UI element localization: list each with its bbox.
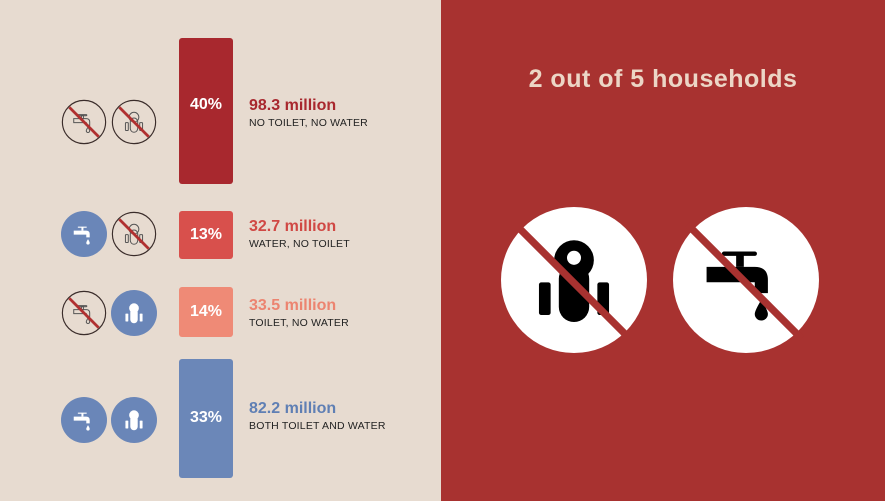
row3 icons [62, 290, 157, 336]
bar 40% [179, 38, 233, 184]
bar 14%: 14% [190, 303, 222, 320]
text 32.7 [249, 218, 350, 250]
bar 40%: 40% [190, 96, 222, 113]
text 33.5 [249, 297, 349, 329]
text 98.3: NO TOILET, NO WATER [249, 117, 368, 129]
row1 icons [62, 100, 156, 144]
text 82.2: 82.2 million [249, 400, 336, 417]
text 32.7: 32.7 million [249, 218, 336, 235]
row4 icons [61, 397, 157, 443]
text 98.3 [249, 97, 368, 129]
bar 13% [179, 211, 233, 259]
bar 13%: 13% [190, 226, 222, 243]
bar 14% [179, 287, 233, 337]
text 32.7: WATER, NO TOILET [249, 238, 350, 250]
text 98.3: 98.3 million [249, 97, 336, 114]
row2 icons [61, 211, 156, 257]
bar 33%: 33% [190, 409, 222, 426]
right panel [441, 0, 885, 501]
text 33.5: TOILET, NO WATER [249, 317, 349, 329]
title: 2 out of 5 households [529, 65, 797, 93]
icon: no toilet [501, 207, 647, 353]
text 82.2 [249, 400, 386, 432]
left panel [0, 0, 441, 501]
text 33.5: 33.5 million [249, 297, 336, 314]
text 82.2: BOTH TOILET AND WATER [249, 420, 386, 432]
icon: no water [673, 207, 819, 353]
bar 33% [179, 359, 233, 478]
